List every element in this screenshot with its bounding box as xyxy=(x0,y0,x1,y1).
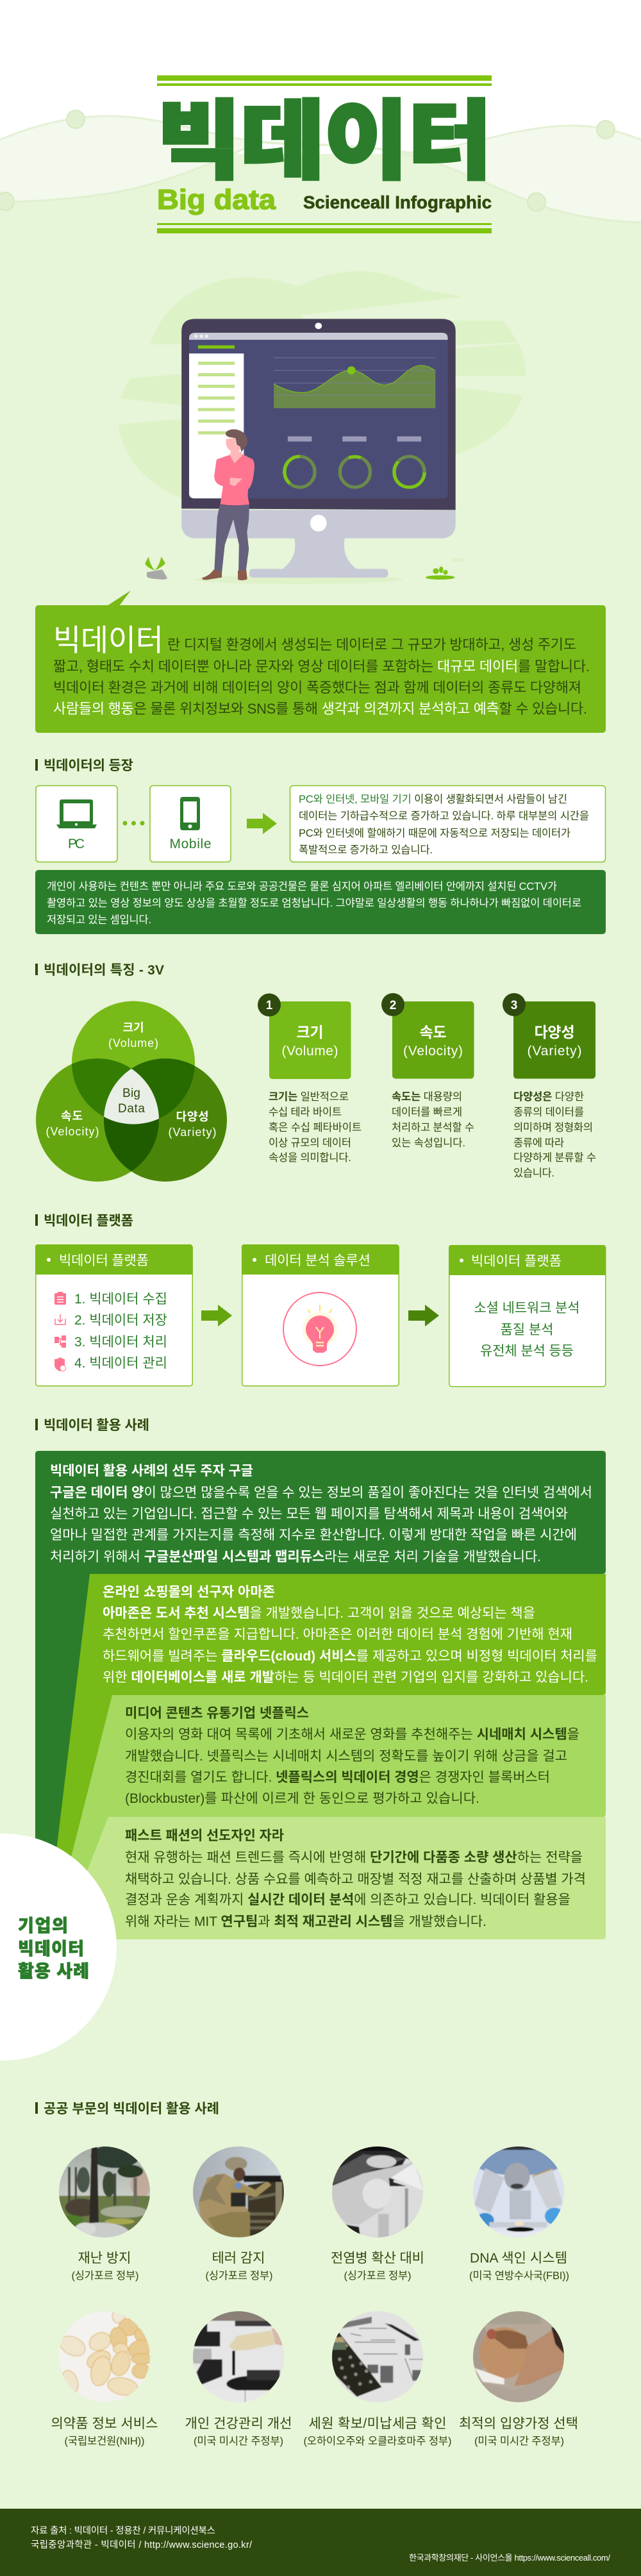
case: google: 실천하고 있는 기업입니다. 접근할 수 있는 모든 웹 페이지를 탐색해서 제목과 내용이 검색어와 xyxy=(50,1507,568,1521)
source text xyxy=(31,2525,253,2550)
case: netflix: 이용자의 영화 대여 목록에 기초해서 새로운 영화를 추천해주는 시네매치 시스템을 xyxy=(125,1727,579,1742)
panel: CCTV note: 촬영하고 있는 영상 정보의 양도 상상을 초월할 정도로 엄청납니다. 그야말로 일상생활의 행동 하나하나가 빠짐없이 데이터로 xyxy=(47,897,581,909)
subtitle: Big data: Big data xyxy=(157,184,276,215)
labels: row one: (싱가포르 정부) xyxy=(344,2270,412,2282)
panel: PC: PC xyxy=(68,837,85,851)
text: velocity description: 있는 속성입니다. xyxy=(392,1137,465,1149)
panel: variety card: 다양성 xyxy=(535,1024,574,1041)
window bar xyxy=(189,333,448,340)
text: volume description: 수십 테라 바이트 xyxy=(269,1106,342,1118)
case: zara: 채택하고 있습니다. 상품 수요를 예측하고 매장별 적정 재고를 산출하며 상품별 가격 xyxy=(125,1872,586,1887)
case: amazon: 온라인 쇼핑몰의 선구자 아마존 xyxy=(103,1585,275,1600)
labels: row one xyxy=(72,2251,569,2282)
heading: platform: 빅데이터 플랫폼 xyxy=(44,1214,133,1228)
heading word: 빅데이터 xyxy=(53,623,163,657)
case: google: 얼마나 밀접한 관계를 가지는지를 측정해 지수로 환산합니다. 이렇게 방대한 작업을 빠른 시간에 xyxy=(50,1528,577,1543)
panel: platform applications: 품질 분석 xyxy=(500,1323,554,1337)
case: google: 빅데이터 활용 사례의 선두 주자 구글 xyxy=(50,1464,253,1478)
photo: forest xyxy=(59,2146,150,2237)
labels: row one: 전염병 확산 대비 xyxy=(331,2251,424,2266)
case: google: 구글은 데이터 양이 많으면 많을수록 얻을 수 있는 정보의 품질이 좋아진다는 것을 인터넷 검색에서 xyxy=(50,1485,592,1500)
panel: emergence explanation: PC와 인터넷에 할애하기 때문에 자동적으로 저장되는 데이터가 xyxy=(299,827,570,839)
source text: 자료 출처 : 빅데이터 - 정용찬 / 커뮤니케이션북스 xyxy=(31,2525,215,2536)
panel: Mobile: Mobile xyxy=(169,837,212,851)
panel: platform list xyxy=(35,1244,192,1386)
panel: emergence explanation: 데이터는 기하급수적으로 증가하고 있습니다. 하루 대부분의 시간을 xyxy=(299,810,589,822)
labels: row two: 개인 건강관리 개선 xyxy=(185,2416,292,2431)
panel: use cases xyxy=(0,1451,606,2061)
chart: venn diagram: (Volume) xyxy=(108,1037,158,1050)
chart: venn diagram xyxy=(36,1001,227,1182)
case: google xyxy=(35,1451,606,1872)
panel: emergence explanation xyxy=(290,786,605,862)
person xyxy=(202,430,254,580)
title: 빅데이터: 빅데이터 xyxy=(157,94,492,190)
photo: father and baby xyxy=(473,2311,564,2402)
labels: row two xyxy=(51,2416,578,2447)
case: zara: 결정과 운송 계획까지 실시간 데이터 분석에 의존하고 있습니다. 빅데이터 활용을 xyxy=(125,1893,570,1907)
case: amazon xyxy=(54,1574,606,1891)
case: netflix xyxy=(67,1695,606,1917)
monitor screen xyxy=(189,339,448,498)
monitor body xyxy=(181,319,456,510)
illustration: monitor and person xyxy=(145,319,465,584)
grass tuft xyxy=(426,567,455,580)
heading: emergence: 빅데이터의 등장 xyxy=(44,758,133,773)
panel: CCTV note: 저장되고 있는 셈입니다. xyxy=(47,914,151,926)
icon: download xyxy=(55,1314,65,1325)
panel: platform list: 3. 빅데이터 처리 xyxy=(74,1335,167,1350)
case: amazon: 아마존은 도서 추천 시스템을 개발했습니다. 고객이 읽을 것으로 예상되는 책을 xyxy=(103,1606,535,1621)
photo: gloves xyxy=(332,2146,423,2237)
badge 2: 2 xyxy=(390,999,396,1012)
icon: phone xyxy=(180,797,200,830)
arrow xyxy=(408,1305,439,1326)
text: variety description: 의미하며 정형화의 xyxy=(513,1121,593,1133)
panel: introduction xyxy=(35,590,606,733)
icon: clipboard xyxy=(54,1292,66,1305)
footer xyxy=(0,2509,641,2576)
panel: platform applications xyxy=(449,1245,606,1387)
intro text: 란 디지털 환경에서 생성되는 데이터로 그 규모가 방대하고, 생성 주기도 xyxy=(167,637,576,653)
case: netflix: 경진대회를 열기도 합니다. 넷플릭스의 빅데이터 경영은 경쟁자인 블록버스터 xyxy=(125,1770,550,1785)
panel: PC xyxy=(36,786,117,862)
labels: row two: 세원 확보/미납세금 확인 xyxy=(309,2416,446,2431)
ground shadow xyxy=(194,575,403,584)
case: amazon: 추천하면서 할인쿠폰을 지급합니다. 아마존은 이러한 데이터 분석 경험에 기반해 현재 xyxy=(103,1627,572,1642)
labels: row two: (미국 미시간 주정부) xyxy=(474,2435,564,2447)
case: zara: 패스트 패션의 선도자인 자라 xyxy=(125,1828,284,1843)
panel: volume card xyxy=(258,994,351,1079)
heading: use cases: 빅데이터 활용 사례 xyxy=(44,1418,149,1433)
area chart xyxy=(274,358,435,408)
labels: row two: (국립보건원(NIH)) xyxy=(64,2435,145,2447)
panel: velocity card xyxy=(381,993,474,1078)
monitor stand xyxy=(282,537,357,569)
background blob behind monitor xyxy=(119,271,526,500)
panel: volume card: (Volume) xyxy=(282,1044,338,1058)
text: variety description: 있습니다. xyxy=(513,1167,554,1179)
heading: public sector: 공공 부문의 빅데이터 활용 사례 xyxy=(44,2102,219,2116)
labels: row one: 테러 감지 xyxy=(212,2251,265,2266)
panel: CCTV note xyxy=(35,870,606,934)
chart: venn diagram: 다양성 xyxy=(176,1110,209,1123)
monitor base xyxy=(249,569,388,578)
panel: variety card: (Variety) xyxy=(527,1044,582,1058)
icon: laptop xyxy=(56,799,97,828)
text: variety description: 종류에 따라 xyxy=(513,1137,564,1149)
case: amazon: 하드웨어를 빌려주는 클라우드(cloud) 서비스를 제공하고 있으며 비정형 빅데이터 처리를 xyxy=(103,1649,597,1664)
case: amazon: 위한 데이터베이스를 새로 개발하는 등 빅데이터 관련 기업의 입지를 강화하고 있습니다. xyxy=(103,1670,588,1685)
icon: shield xyxy=(54,1357,65,1371)
chart: venn diagram: (Variety) xyxy=(168,1126,217,1139)
badge 1: 1 xyxy=(266,999,273,1012)
panel: volume card: 크기 xyxy=(296,1024,323,1041)
icon: process xyxy=(54,1335,66,1348)
chart: venn diagram: Big xyxy=(122,1087,140,1100)
labels: row two: (미국 미시간 주정부) xyxy=(194,2435,283,2447)
monitor chin xyxy=(181,510,456,539)
panel: platform applications: 유전체 분석 등등 xyxy=(480,1344,574,1359)
case: zara: 위해 자라는 MIT 연구팀과 최적 재고관리 시스템을 개발했습니다. xyxy=(125,1914,487,1929)
icon: light bulb xyxy=(283,1292,356,1366)
labels: row one: (싱가포르 정부) xyxy=(205,2270,273,2282)
donut charts xyxy=(285,456,424,487)
panel: emergence explanation: 폭발적으로 증가하고 있습니다. xyxy=(299,844,433,856)
text: velocity description: 속도는 대용량의 xyxy=(392,1091,462,1103)
badge 3: 3 xyxy=(511,999,517,1012)
panel: platform applications: 빅데이터 플랫폼 xyxy=(471,1254,562,1269)
text: variety description: 다양하게 분류할 수 xyxy=(513,1151,596,1164)
labels: row two: 의약품 정보 서비스 xyxy=(51,2416,158,2431)
panel: velocity card: (Velocity) xyxy=(403,1044,463,1058)
stat labels xyxy=(288,437,421,442)
case: zara xyxy=(64,1817,606,1939)
intro text: 짧고, 형태도 수치 데이터뿐 아니라 문자와 영상 데이터를 포함하는 대규모 데이터를 말합니다. xyxy=(53,658,590,674)
icon: dots xyxy=(123,821,145,826)
intro text: 사람들의 행동은 물론 위치정보와 SNS를 통해 생각과 의견까지 분석하고 예측할 수 있습니다. xyxy=(53,701,587,717)
text: volume description: 이상 규모의 데이터 xyxy=(269,1137,351,1149)
text: variety description xyxy=(513,1091,596,1179)
intro text: 빅데이터 환경은 과거에 비해 데이터의 양이 폭증했다는 점과 함께 데이터의 종류도 다양해져 xyxy=(53,680,581,696)
chart: venn diagram: 속도 xyxy=(61,1110,83,1123)
labels: row one: 재난 방지 xyxy=(78,2251,131,2266)
text: volume description xyxy=(269,1091,362,1164)
callout: company use cases: 빅데이터 xyxy=(18,1939,84,1959)
case: google: 처리하기 위해서 구글분산파일 시스템과 맵리듀스라는 새로운 처리 기술을 개발했습니다. xyxy=(50,1550,541,1564)
background hills xyxy=(0,0,641,222)
labels: row two: 최적의 입양가정 선택 xyxy=(459,2416,578,2431)
panel: platform list: 빅데이터 플랫폼 xyxy=(59,1253,149,1268)
text: velocity description: 데이터를 빠르게 xyxy=(392,1106,462,1118)
photo: soldier xyxy=(193,2146,284,2237)
text: variety description: 종류의 데이터를 xyxy=(513,1106,584,1118)
source text: 국립중앙과학관 - 빅데이터 / http://www.science.go.kr/ xyxy=(31,2539,253,2550)
labels: row one: (싱가포르 정부) xyxy=(72,2270,138,2282)
intro text xyxy=(53,637,590,717)
panel: emergence explanation: PC와 인터넷, 모바일 기기 이용이 생활화되면서 사람들이 남긴 xyxy=(299,793,567,805)
panel: variety card xyxy=(503,993,595,1078)
panel: platform list: 4. 빅데이터 관리 xyxy=(74,1356,167,1371)
text: volume description: 혹은 수십 페타바이트 xyxy=(269,1121,362,1133)
badge 1 xyxy=(258,994,281,1017)
case: zara: 현재 유행하는 패션 트렌드를 즉시에 반영해 단기간에 다품종 소량 생산하는 전략을 xyxy=(125,1850,583,1865)
callout: company use cases xyxy=(0,1834,117,2061)
chart: venn diagram: Data xyxy=(118,1102,145,1116)
labels: row one: DNA 색인 시스템 xyxy=(470,2251,567,2266)
arrow xyxy=(201,1305,232,1326)
photo: calculator xyxy=(332,2311,423,2402)
text: velocity description: 처리하고 분석할 수 xyxy=(392,1121,474,1133)
text: volume description: 속성을 의미합니다. xyxy=(269,1151,351,1164)
sidebar panel xyxy=(189,353,244,498)
text: velocity description xyxy=(392,1091,474,1149)
panel: analysis solution xyxy=(242,1244,399,1386)
photo: capsules xyxy=(59,2311,150,2402)
callout: company use cases: 활용 사례 xyxy=(18,1962,89,1981)
title block xyxy=(157,76,492,233)
arrow xyxy=(247,813,277,834)
panel: platform applications: 소셜 네트워크 분석 xyxy=(474,1301,579,1316)
labels: row one: (미국 연방수사국(FBI)) xyxy=(469,2270,569,2282)
chart: venn diagram: (Velocity) xyxy=(46,1125,99,1138)
case: netflix: (Blockbuster)를 파산에 이르게 한 동인으로 평가하고 있습니다. xyxy=(125,1791,479,1806)
heading: 3V: 빅데이터의 특징 - 3V xyxy=(44,963,164,978)
badge 2 xyxy=(381,993,404,1016)
text: variety description: 다양성은 다양한 xyxy=(513,1091,584,1103)
chart: venn diagram: 크기 xyxy=(123,1021,144,1034)
panel: platform list: 1. 빅데이터 수집 xyxy=(74,1292,167,1307)
badge 3 xyxy=(503,993,526,1016)
photo: lab xyxy=(193,2311,284,2402)
case: netflix: 미디어 콘텐츠 유통기업 넷플릭스 xyxy=(125,1706,309,1721)
panel: CCTV note: 개인이 사용하는 컨텐츠 뿐만 아니라 주요 도로와 공공건물은 물론 심지어 아파트 엘리베이터 안에까지 설치된 CCTV가 xyxy=(47,880,557,892)
credit: 한국과학창의재단 - 사이언스올 https://www.scienceall.com/ xyxy=(409,2553,610,2563)
plant on rock xyxy=(145,556,167,580)
panel: Mobile xyxy=(150,786,231,862)
subtitle: Scienceall Infographic: Scienceall Infographic xyxy=(303,192,492,212)
panel: velocity card: 속도 xyxy=(419,1024,446,1041)
photo: microscope xyxy=(473,2146,564,2237)
labels: row two: (오하이오주와 오클라호마주 정부) xyxy=(304,2435,451,2447)
panel: platform list: 2. 빅데이터 저장 xyxy=(74,1313,167,1328)
text: volume description: 크기는 일반적으로 xyxy=(269,1091,349,1103)
panel: analysis solution: 데이터 분석 솔루션 xyxy=(265,1253,370,1268)
callout: company use cases: 기업의 xyxy=(18,1916,68,1936)
case: netflix: 개발했습니다. 넷플릭스는 시네매치 시스템의 정확도를 높이기 위해 상금을 걸고 xyxy=(125,1749,567,1764)
